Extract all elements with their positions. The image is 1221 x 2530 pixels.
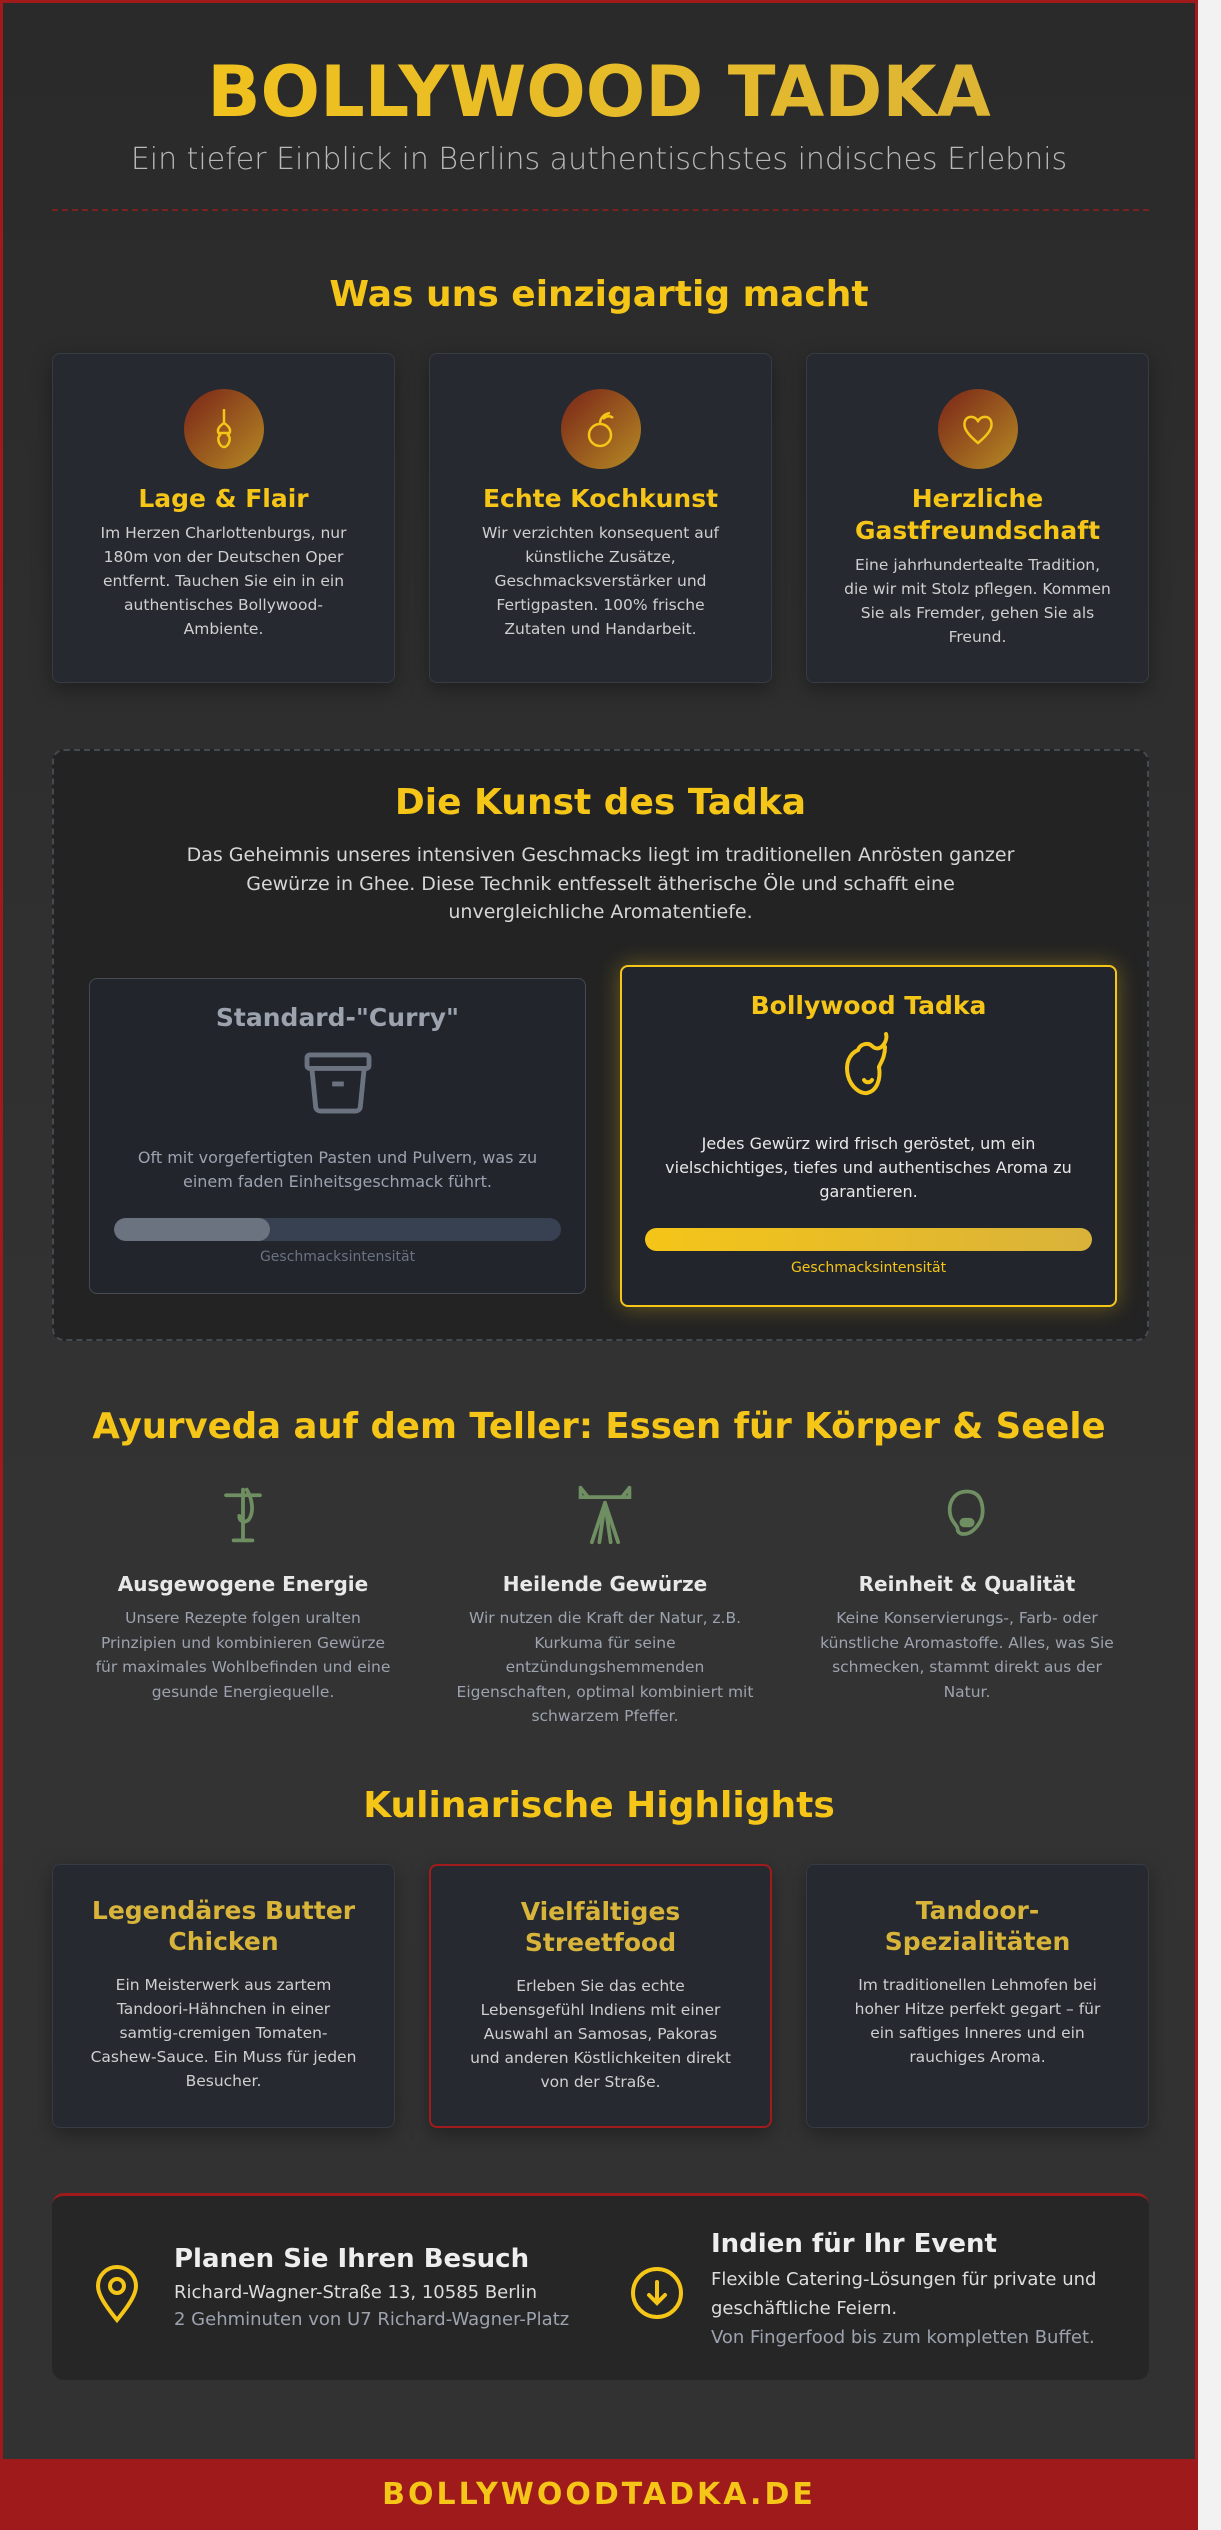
card: Standard-Curry: Geschmacksintensität: [260, 1249, 415, 1265]
panel: ayurveda columns: [96, 1486, 1114, 1725]
icon: mortar: [578, 1486, 632, 1544]
card: Streetfood: [429, 1864, 772, 2128]
column: Heilende Gewürze: [457, 1486, 754, 1725]
card: Bollywood Tadka: Bollywood Tadka: [751, 991, 986, 1020]
heading: einzigartig: Was uns einzigartig macht: [329, 274, 869, 315]
heading: Ayurveda: Ayurveda auf dem Teller: Essen für Körper & Seele: [92, 1406, 1106, 1447]
card: Butter Chicken: [52, 1864, 395, 2128]
heading: Highlights: Kulinarische Highlights: [363, 1785, 835, 1826]
text: visit: [174, 2244, 569, 2330]
card: Streetfood: Streetfood: [525, 1928, 676, 1957]
card: Streetfood: Vielfältiges: [521, 1897, 680, 1926]
card: Gastfreundschaft: Herzliche: [912, 484, 1043, 513]
card: Butter Chicken: Ein Meisterwerk aus zartem Tandoori-Hähnchen in einer samtig-cremigen Tomaten-Cashew-Sauce. Ein Muss für jeden Besucher.: [91, 1976, 356, 2090]
card: Standard-Curry: [89, 978, 586, 1294]
card: Echte Kochkunst: Wir verzichten konsequent auf künstliche Zusätze, Geschmacksverstärker und Fertigpasten. 100% frische Zutaten und Handarbeit.: [482, 524, 719, 638]
icon: leaf: [948, 1490, 985, 1536]
column: Heilende Gewürze: Heilende Gewürze: [503, 1572, 707, 1596]
icon: spice: [845, 1032, 888, 1096]
text: event: Indien für Ihr Event: [711, 2229, 997, 2259]
card: Gastfreundschaft: Gastfreundschaft: [855, 516, 1100, 545]
text: event: Von Fingerfood bis zum kompletten Buffet.: [711, 2327, 1095, 2348]
bar: tadka intensity: [645, 1228, 1092, 1251]
card: Standard-Curry: Oft mit vorgefertigten Pasten und Pulvern, was zu einem faden Einheitsgeschmack führt.: [138, 1148, 537, 1191]
card: Tandoor: Im traditionellen Lehmofen bei hoher Hitze perfekt gegart – für ein saftiges Inneres und ein rauchiges Aroma.: [855, 1976, 1100, 2066]
footer: BOLLYWOODTADKA.DE: [382, 2477, 816, 2512]
card: Butter Chicken: Legendäres Butter: [92, 1896, 355, 1925]
column: Reinheit & Qualität: Reinheit & Qualität: [859, 1572, 1075, 1596]
card: Bollywood Tadka: Geschmacksintensität: [791, 1260, 946, 1276]
column: Ausgewogene Energie: Ausgewogene Energie: [118, 1572, 368, 1596]
card: Tandoor: Spezialitäten: [885, 1927, 1070, 1956]
column: Ausgewogene Energie: [96, 1488, 390, 1700]
column: Reinheit & Qualität: [820, 1490, 1114, 1700]
text: visit: Planen Sie Ihren Besuch: [174, 2244, 529, 2274]
card: Lage & Flair: Lage & Flair: [138, 484, 309, 513]
card: Tandoor: Tandoor-: [916, 1896, 1039, 1925]
bar: standard intensity: [114, 1218, 561, 1241]
panel: highlight cards: [51, 1864, 1150, 2135]
subtitle: Ein tiefer Einblick in Berlins authentischstes indisches Erlebnis: [131, 142, 1067, 177]
card: Lage & Flair: [52, 353, 395, 683]
card: Gastfreundschaft: [806, 353, 1149, 683]
icon: location pin: [96, 2265, 138, 2323]
card: Echte Kochkunst: [429, 353, 772, 683]
column: Ausgewogene Energie: Unsere Rezepte folgen uralten Prinzipien und kombinieren Gewürze für maximales Wohlbefinden und eine gesunde Energiequelle.: [96, 1609, 390, 1700]
title: [3, 49, 1195, 135]
text: event: [711, 2229, 1096, 2348]
footer: [0, 2459, 1198, 2530]
card: Butter Chicken: Chicken: [168, 1927, 279, 1956]
icon: arrow down circle: [631, 2267, 683, 2319]
icon: balance: [224, 1488, 262, 1542]
text: visit: 2 Gehminuten von U7 Richard-Wagner-Platz: [174, 2309, 569, 2330]
text: visit: Richard-Wagner-Straße 13, 10585 Berlin: [174, 2282, 537, 2303]
column: Reinheit & Qualität: Keine Konservierungs-, Farb- oder künstliche Aromastoffe. Alles, was Sie schmecken, stammt direkt aus der Natur.: [820, 1609, 1114, 1700]
icon: incense: [184, 389, 264, 469]
panel: info: [52, 2193, 1149, 2380]
icon: heart: [938, 389, 1018, 469]
panel: Die Kunst des Tadka: [52, 749, 1149, 1341]
card: Bollywood Tadka: [620, 965, 1117, 1307]
column: Heilende Gewürze: Wir nutzen die Kraft der Natur, z.B. Kurkuma für seine entzündungshemmenden Eigenschaften, optimal kombiniert mit schwarzem Pfeffer.: [457, 1609, 753, 1725]
card: Echte Kochkunst: Echte Kochkunst: [483, 484, 718, 513]
card: Lage & Flair: Im Herzen Charlottenburgs, nur 180m von der Deutschen Oper entfernt. Tauchen Sie ein in ein authentisches Bollywood-Ambiente.: [101, 524, 346, 638]
panel: unique cards: [52, 353, 1149, 689]
text: intro: Das Geheimnis unseres intensiven Geschmacks liegt im traditionellen Anrösten ganzer Gewürze in Ghee. Diese Technik entfesselt ätherische Öle und schafft eine unvergleichliche Aromatentiefe.: [187, 844, 1014, 923]
icon: fruit: [560, 389, 640, 469]
heading: Tadka: Die Kunst des Tadka: [395, 782, 806, 823]
icon: jar: [304, 1052, 372, 1114]
title: BOLLYWOOD TADKA: [207, 51, 991, 133]
card: Bollywood Tadka: Jedes Gewürz wird frisch geröstet, um ein vielschichtiges, tiefes und authentisches Aroma zu garantieren.: [665, 1134, 1072, 1201]
card: Standard-Curry: Standard-"Curry": [216, 1003, 459, 1032]
text: event: Flexible Catering-Lösungen für private und geschäftliche Feiern.: [711, 2269, 1096, 2319]
card: Tandoor: [806, 1864, 1149, 2128]
card: Streetfood: Erleben Sie das echte Lebensgefühl Indiens mit einer Auswahl an Samosas, Pakoras und anderen Köstlichkeiten direkt von der Straße.: [470, 1977, 731, 2091]
card: Gastfreundschaft: Eine jahrhundertealte Tradition, die wir mit Stolz pflegen. Kommen Sie als Fremder, gehen Sie als Freund.: [844, 556, 1111, 646]
